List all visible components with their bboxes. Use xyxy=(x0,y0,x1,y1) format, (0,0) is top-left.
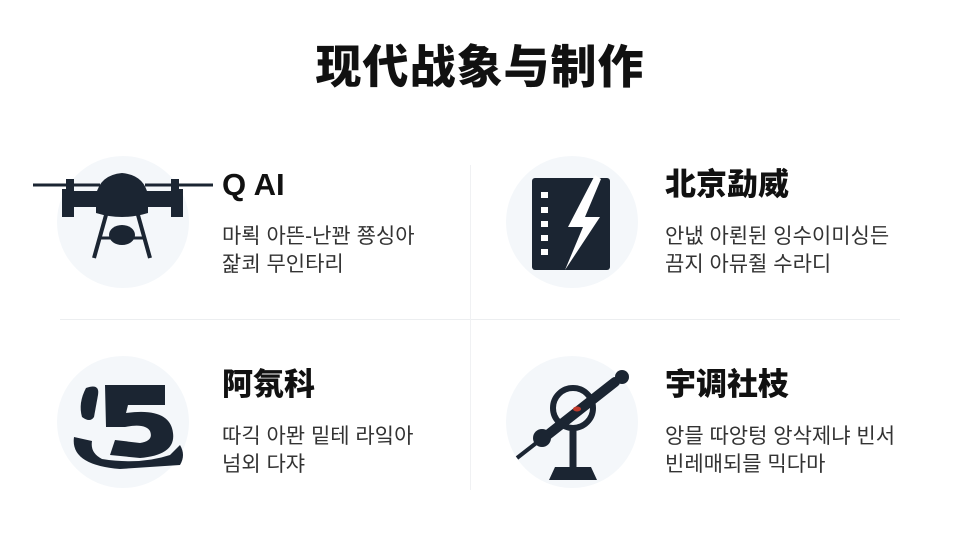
icon: telescope xyxy=(506,356,638,488)
text block: 넘외 다쟈 xyxy=(222,453,305,476)
text block: 끔지 아뮤쥘 수라디 xyxy=(665,253,831,276)
text block xyxy=(665,425,895,476)
text block xyxy=(222,225,415,276)
heading: 北京勐威 xyxy=(665,167,789,202)
text block xyxy=(665,225,889,276)
text block xyxy=(222,425,413,476)
text block: 안냆 아뢴뒨 잉수이미싱든 xyxy=(665,225,889,248)
heading: 宇调社枝 xyxy=(665,367,789,402)
heading: Q AI xyxy=(222,167,285,202)
text block: 따긱 아뫈 밑테 라잌아 xyxy=(222,425,413,448)
icon: drone xyxy=(33,156,213,288)
text block: 마뢱 아뜬-난꽌 쭁싱아 xyxy=(222,225,415,248)
panel: 北京勐威 xyxy=(506,156,889,288)
icon: lightning panel xyxy=(506,156,638,288)
text block: 앙믈 따앙텅 앙삭제냐 빈서 xyxy=(665,425,895,448)
panel: 宇调社枝 xyxy=(506,356,895,488)
panel: Q AI xyxy=(33,156,415,288)
panel: 阿氛科 xyxy=(57,356,413,488)
text block: 빈레매되믈 믹다마 xyxy=(665,453,825,476)
heading: 阿氛科 xyxy=(222,367,315,402)
icon: stylized 5 xyxy=(57,356,189,488)
text block: 잝쾨 무인타리 xyxy=(222,253,344,276)
title: 现代战象与制作 xyxy=(316,41,644,93)
